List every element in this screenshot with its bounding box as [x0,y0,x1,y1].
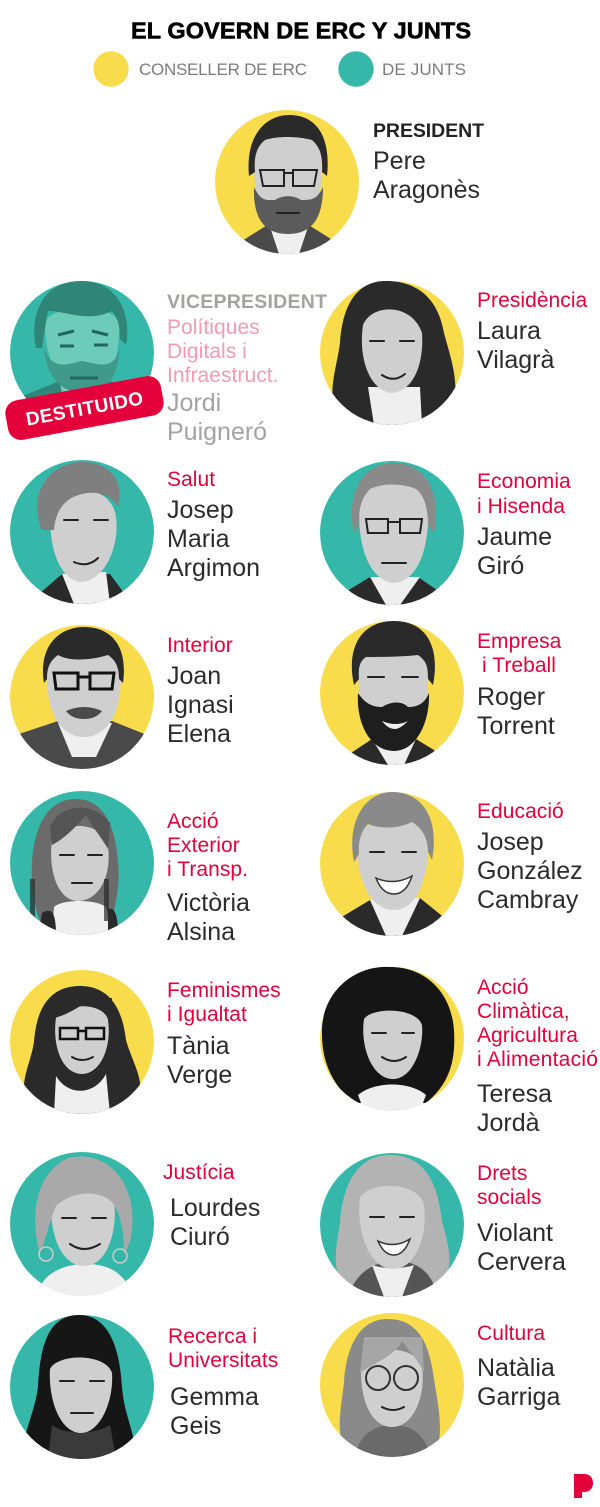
portrait: Laura Vilagrà [320,281,464,425]
panel: president Pere Aragonès [215,110,484,262]
portrait: Lourdes Ciuró [10,1152,154,1296]
role and name [477,289,588,374]
role and name: Torrent [477,712,555,740]
role and name: Educació [477,800,564,823]
role and name [168,1325,278,1440]
role and name [167,634,234,748]
portrait: Tània Verge [10,970,154,1114]
panel: Violant Cervera [320,1153,566,1297]
role and name [477,800,583,914]
role and name: Argimon [167,554,260,582]
role and name: Natàlia [477,1354,555,1382]
panel: Joan Ignasi Elena [10,625,234,777]
portrait: Jordi Puigneró, tinted [10,281,154,398]
portrait: Josep González Cambray [320,792,464,940]
badge: Destituido [3,374,166,442]
role and name: Giró [477,552,524,580]
role and name: Feminismes [167,979,281,1002]
role and name [477,976,598,1137]
role and name: Infraestruct. [167,364,279,387]
portrait: Pere Aragonès [215,110,359,262]
role and name [167,468,260,582]
portrait: Teresa Jordà [320,967,464,1111]
role and name: Ignasi [167,691,234,719]
role and name: Digitals i [167,340,247,363]
role and name [477,630,562,740]
panel: Tània Verge [10,970,281,1114]
role and name: Joan [167,662,221,690]
legend: ERC label: CONSELLER DE ERC [139,60,307,79]
role and name: Salut [167,468,215,491]
role and name: Lourdes [170,1194,260,1222]
role and name: Victòria [167,889,250,917]
role and name: Pere [373,147,426,175]
role and name: Acció [167,810,219,833]
role and name: Garriga [477,1383,560,1411]
panel: Jaume Giró [320,461,571,605]
role and name: Josep [167,496,234,524]
role and name: Acció [477,976,529,999]
role and name: Jordà [477,1109,540,1137]
role and name: Interior [167,634,233,657]
role and name: Jaume [477,523,552,551]
panel: Natàlia Garriga [320,1313,560,1457]
role and name: Empresa [477,630,562,653]
panel: Josep Maria Argimon [10,460,260,604]
role and name: PRESIDENT [373,120,484,142]
panel: vicepresident Jordi Puigneró [3,281,327,446]
role and name: Recerca i [168,1325,257,1348]
role and name: socials [477,1186,542,1209]
role and name: Polítiques [167,316,260,339]
role and name: i Hisenda [477,495,565,518]
portrait: Victòria Alsina [10,791,154,935]
role and name [167,291,327,446]
role and name: i Transp. [167,858,248,881]
role and name: Violant [477,1219,553,1247]
role and name: Agricultura [477,1024,578,1047]
role and name: Cultura [477,1322,545,1345]
role and name: Tània [167,1032,230,1060]
role and name: Justícia [163,1161,235,1184]
portrait: Natàlia Garriga [320,1313,464,1457]
panel: Laura Vilagrà [320,281,588,425]
role and name: Climàtica, [477,1000,570,1023]
legend: ERC yellow swatch [93,51,129,87]
role and name: Drets [477,1162,527,1185]
role and name: Puigneró [167,418,267,446]
panel: Teresa Jordà [320,967,598,1137]
role and name: Universitats [168,1349,278,1372]
panel: Lourdes Ciuró [10,1152,260,1296]
role and name [477,1322,560,1411]
role and name: Aragonès [373,176,480,204]
legend: Junts teal swatch [338,51,374,87]
role and name [167,810,250,946]
role and name: Alsina [167,918,235,946]
role and name: Laura [477,317,541,345]
role and name: Verge [167,1061,232,1089]
role and name: Presidència [477,289,588,312]
role and name: VICEPRESIDENT [167,291,327,313]
role and name: Economia [477,470,571,493]
role and name: Ciuró [170,1223,230,1251]
role and name [167,979,281,1089]
role and name: i Treball [482,654,556,677]
portrait: Roger Torrent [320,621,464,769]
legend: Junts label: DE JUNTS [382,60,466,79]
portrait: Violant Cervera [320,1153,464,1297]
role and name: Elena [167,720,231,748]
badge: Destituido: DESTITUIDO [24,388,145,431]
role and name: i Igualtat [167,1003,247,1026]
portrait: Jaume Giró [320,461,464,605]
role and name: Gemma [170,1383,259,1411]
role and name [477,470,571,580]
portrait: Gemma Geis [10,1315,154,1459]
role and name: Josep [477,828,544,856]
legend [93,51,466,87]
role and name: González [477,857,583,885]
role and name: Cervera [477,1248,566,1276]
role and name: Jordi [167,389,221,417]
portrait: Josep Maria Argimon [10,460,154,604]
role and name: Vilagrà [477,346,554,374]
role and name [477,1162,566,1276]
role and name: Roger [477,683,545,711]
portrait: Joan Ignasi Elena [10,625,154,777]
role and name [163,1161,260,1251]
role and name: i Alimentació [477,1048,598,1071]
panel: Victòria Alsina [10,791,250,946]
role and name [373,120,484,204]
role and name: Geis [170,1412,221,1440]
role and name: Maria [167,525,230,553]
title: EL GOVERN DE ERC Y JUNTS [131,18,471,44]
panel: Roger Torrent [320,621,562,769]
panel: Gemma Geis [10,1315,278,1459]
role and name: Cambray [477,886,579,914]
logo: publisher P [574,1474,593,1498]
role and name: Teresa [477,1080,552,1108]
role and name: Exterior [167,834,240,857]
panel: Josep González Cambray [320,792,583,940]
